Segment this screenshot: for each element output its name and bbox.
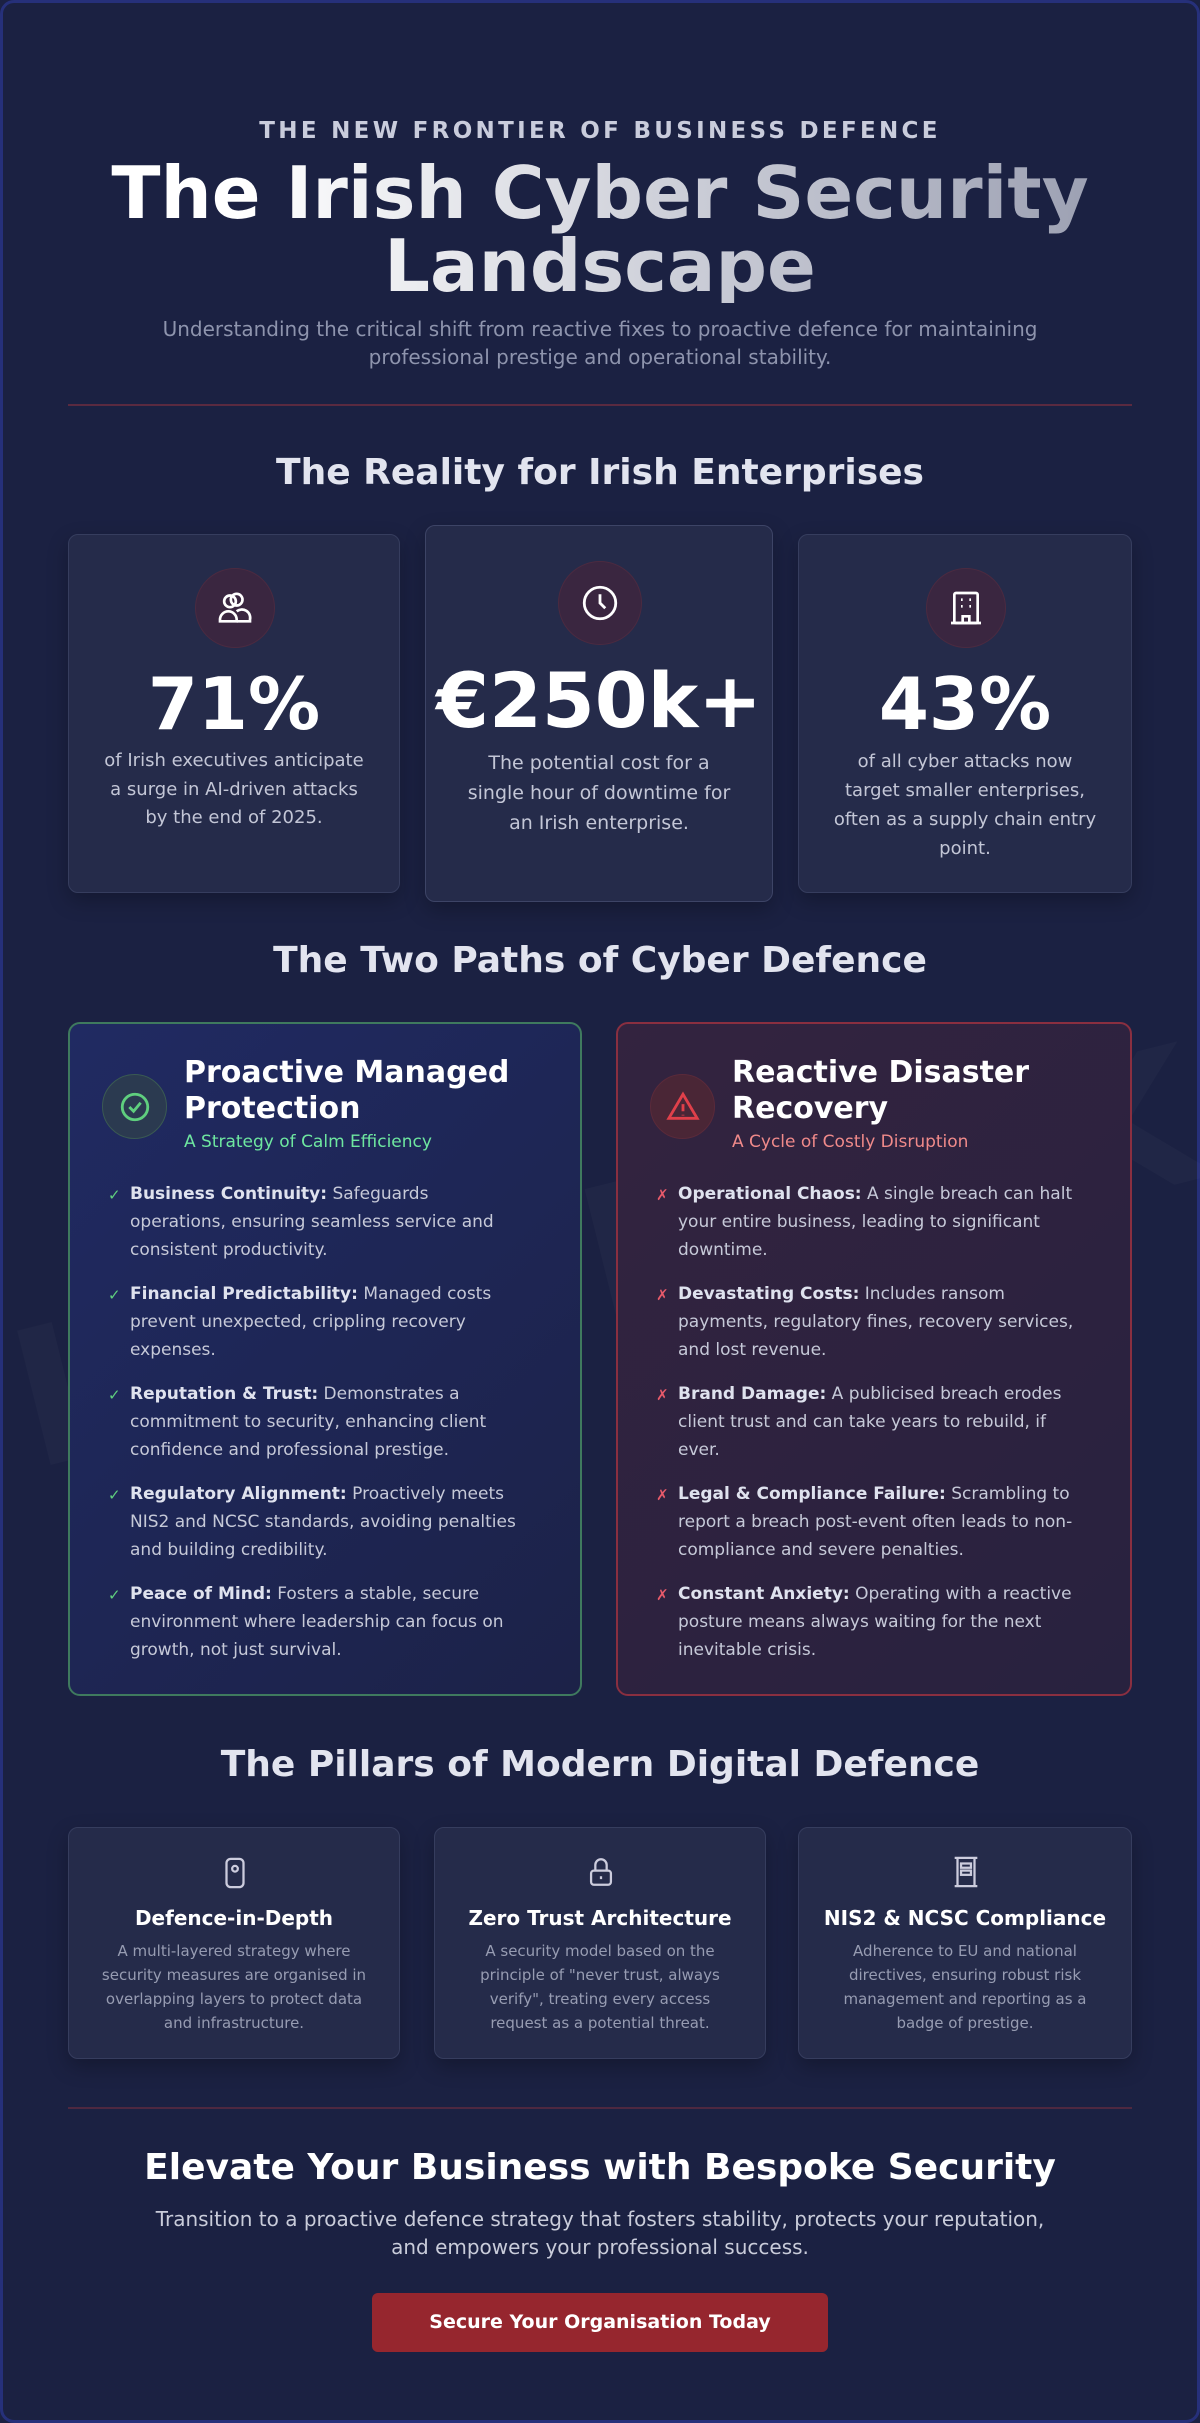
items: Operational Chaos: A single breach can halt your entire business, leading to significant downtime. [678, 1184, 1072, 1260]
pillar: compliance: Adherence to EU and national directives, ensuring robust risk management and reporting as a badge of prestige. [844, 1942, 1086, 2032]
items: ✗ [656, 1586, 669, 1604]
subtitle: Understanding the critical shift from reactive fixes to proactive defence for maintaining professional prestige and operational stability. [163, 317, 1037, 369]
items: Brand Damage: A publicised breach erodes client trust and can take years to rebuild, if ever. [678, 1384, 1062, 1460]
title [0, 157, 1200, 303]
icon: warning [650, 1074, 715, 1139]
CTA button [372, 2293, 828, 2352]
items [656, 1184, 1073, 1660]
pillar: zero trust: A security model based on the principle of "never trust, always verify", treating every access request as a potential threat. [480, 1942, 720, 2032]
CTA heading: Elevate Your Business with Bespoke Security [144, 2147, 1056, 2188]
panel: proactive [68, 1022, 582, 1696]
pillar: zero trust: Zero Trust Architecture [468, 1906, 732, 1930]
pillar: defence in depth: Defence-in-Depth [135, 1906, 333, 1930]
items: Legal & Compliance Failure: Scrambling to report a breach post-event often leads to non-compliance and severe penalties. [678, 1484, 1072, 1560]
pillar: compliance [798, 1827, 1132, 2059]
title: Landscape [384, 224, 816, 308]
pillar: defence in depth: A multi-layered strategy where security measures are organised in overlapping layers to protect data and infrastructure. [102, 1942, 366, 2032]
pillar: defence in depth [68, 1827, 400, 2059]
items: Business Continuity: Safeguards operations, ensuring seamless service and consistent productivity. [130, 1184, 494, 1260]
title: The Irish Cyber Security [111, 151, 1089, 235]
icon: users [195, 568, 275, 648]
description: The potential cost for a single hour of downtime for an Irish enterprise. [468, 752, 730, 834]
panel title [732, 1055, 1029, 1126]
pillar: compliance: NIS2 & NCSC Compliance [824, 1906, 1106, 1930]
icon: clock [558, 561, 642, 645]
number: €250k+ [436, 656, 762, 745]
stat card: 71% [68, 534, 400, 893]
items: ✓ [108, 1386, 121, 1404]
items: ✓ [108, 1186, 121, 1204]
icon: check circle [102, 1074, 167, 1139]
icon: lock [590, 1858, 612, 1886]
pillar: zero trust [434, 1827, 766, 2059]
heading: reality: The Reality for Irish Enterprises [276, 452, 924, 493]
kicker: THE NEW FRONTIER OF BUSINESS DEFENCE [259, 118, 941, 144]
stat card: 43% [798, 534, 1132, 893]
CTA button: Secure Your Organisation Today [429, 2311, 771, 2333]
panel title: Protection [184, 1091, 360, 1126]
items: ✓ [108, 1586, 121, 1604]
items: ✗ [656, 1386, 669, 1404]
panel: reactive [616, 1022, 1132, 1696]
stat card: €250k+ [425, 525, 773, 902]
description: of all cyber attacks now target smaller enterprises, often as a supply chain entry point. [834, 751, 1096, 859]
items: ✓ [108, 1286, 121, 1304]
items: Financial Predictability: Managed costs prevent unexpected, crippling recovery expenses. [130, 1284, 491, 1360]
panel title: Reactive Disaster [732, 1055, 1029, 1090]
panel title [184, 1055, 509, 1126]
items: Regulatory Alignment: Proactively meets NIS2 and NCSC standards, avoiding penalties and building credibility. [130, 1484, 516, 1560]
items: ✗ [656, 1286, 669, 1304]
icon: server [954, 1856, 978, 1888]
CTA text: Transition to a proactive defence strategy that fosters stability, protects your reputation, and empowers your professional success. [156, 2207, 1044, 2259]
description: of Irish executives anticipate a surge in AI-driven attacks by the end of 2025. [104, 750, 364, 828]
number: 43% [879, 662, 1051, 746]
items: ✗ [656, 1486, 669, 1504]
icon: device [225, 1858, 245, 1888]
heading: two paths: The Two Paths of Cyber Defence [273, 940, 927, 981]
items: Devastating Costs: Includes ransom payments, regulatory fines, recovery services, and lost revenue. [678, 1284, 1073, 1360]
heading: pillars: The Pillars of Modern Digital Defence [221, 1744, 979, 1785]
panel title: Proactive Managed [184, 1055, 509, 1090]
items: ✗ [656, 1186, 669, 1204]
number: 71% [148, 662, 320, 746]
panel subtitle: A Cycle of Costly Disruption [732, 1132, 968, 1152]
items: Reputation & Trust: Demonstrates a commitment to security, enhancing client confidence and professional prestige. [130, 1384, 486, 1460]
items: Peace of Mind: Fosters a stable, secure environment where leadership can focus on growth, not just survival. [130, 1584, 504, 1660]
items: ✓ [108, 1486, 121, 1504]
panel subtitle: A Strategy of Calm Efficiency [184, 1132, 432, 1152]
icon: building [926, 568, 1006, 648]
items [108, 1184, 516, 1660]
panel title: Recovery [732, 1091, 888, 1126]
items: Constant Anxiety: Operating with a reactive posture means always waiting for the next inevitable crisis. [678, 1584, 1072, 1660]
